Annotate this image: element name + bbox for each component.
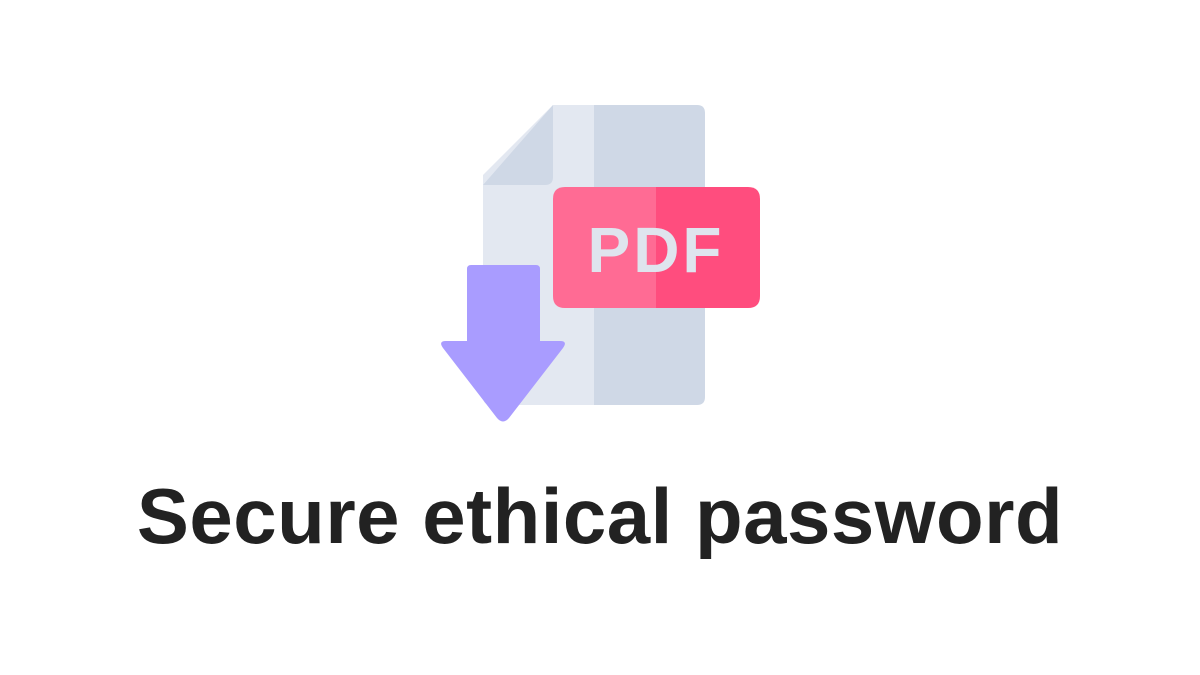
icon: download arrow — [441, 265, 565, 422]
icon: document sheet — [483, 105, 705, 405]
title: Secure ethical password — [137, 472, 1063, 560]
icon: PDF badge — [553, 187, 760, 308]
icon: PDF badge: PDF — [588, 214, 724, 286]
